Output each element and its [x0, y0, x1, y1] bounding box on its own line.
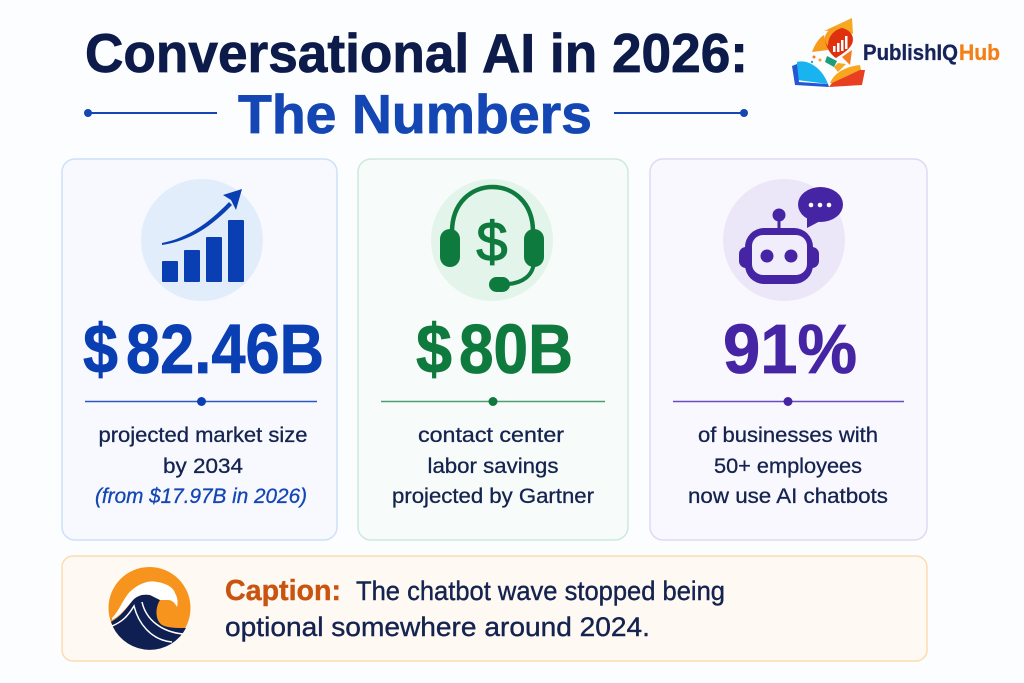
stat: $82.46B: $	[83, 310, 118, 388]
icon: headset with dollar: $	[476, 210, 508, 273]
logo: PublishIQHub: Hub	[959, 40, 1000, 65]
icon: robot with speech bubble	[723, 179, 845, 301]
stat: $82.46B: 82.46B	[126, 310, 324, 388]
stat: 91%: 91%	[723, 310, 857, 388]
title: Conversational AI in 2026:	[85, 22, 748, 84]
description: market size: by 2034	[163, 455, 243, 478]
description: labor savings: contact center	[418, 424, 564, 447]
description: labor savings: projected by Gartner	[392, 485, 594, 508]
description: market size: (from $17.97B in 2026)	[95, 485, 307, 508]
caption text	[225, 575, 725, 642]
panel: labor savings	[358, 159, 628, 540]
description: labor savings: labor savings	[428, 455, 558, 478]
description: chatbot adoption: of businesses with	[698, 424, 878, 447]
title	[84, 22, 748, 145]
description: labor savings	[392, 424, 594, 508]
panel: AI chatbot adoption	[650, 159, 927, 540]
icon: headset with dollar	[431, 179, 553, 301]
description: chatbot adoption	[688, 424, 888, 508]
panel: caption	[62, 556, 927, 661]
stat: $80B	[416, 310, 573, 388]
stat: $80B: 80B	[459, 310, 573, 388]
icon: rising bar chart	[141, 179, 263, 301]
title: The Numbers	[238, 83, 592, 145]
logo: PublishIQHub: PublishIQ	[863, 40, 958, 65]
description: chatbot adoption: now use AI chatbots	[688, 485, 888, 508]
caption text: The chatbot wave stopped being	[356, 576, 725, 606]
description: market size	[95, 424, 308, 508]
description: market size: projected market size	[98, 424, 308, 447]
logo: PublishIQHub	[792, 18, 1000, 87]
panel: market size	[62, 159, 337, 540]
stat: $80B: $	[416, 310, 452, 388]
icon: ocean wave	[108, 567, 190, 650]
description: chatbot adoption: 50+ employees	[714, 455, 862, 478]
caption text: Caption:	[225, 575, 341, 607]
caption text: optional somewhere around 2024.	[225, 612, 650, 642]
